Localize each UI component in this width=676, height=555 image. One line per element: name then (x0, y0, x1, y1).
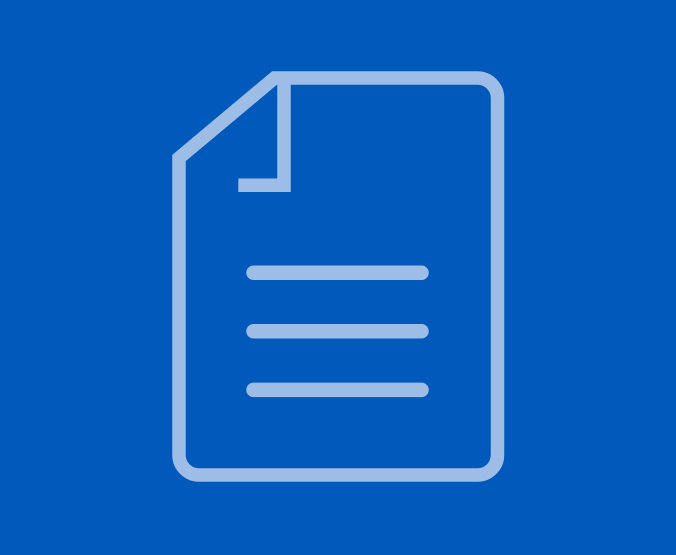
folded corner (238, 78, 284, 185)
document outline (179, 78, 498, 475)
icon: document (179, 78, 498, 475)
line 1 (254, 265, 422, 280)
text lines (254, 273, 422, 390)
line 2 (254, 324, 422, 339)
line 3 (254, 383, 422, 397)
